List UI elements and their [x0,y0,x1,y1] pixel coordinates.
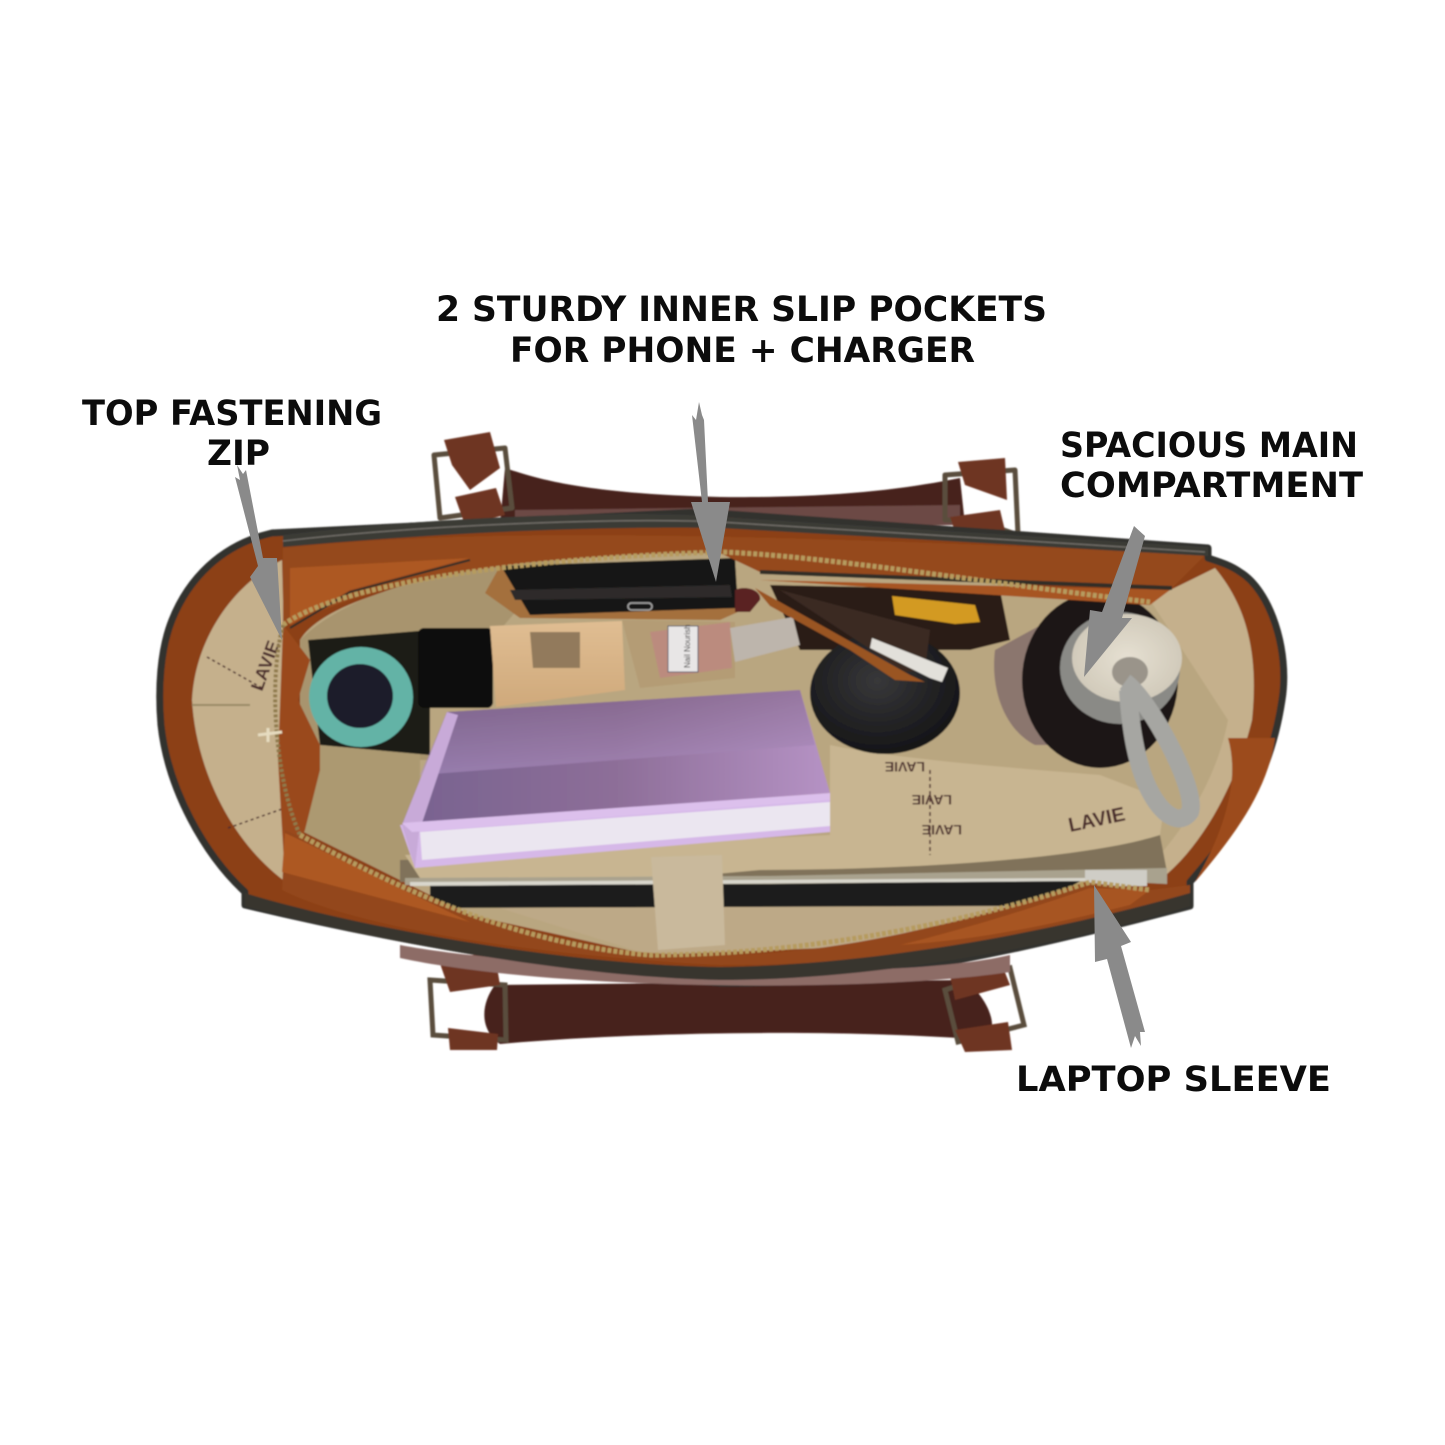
right lining [1100,568,1275,890]
band above laptop [400,835,1167,882]
wallet pocket with phone [485,558,760,620]
callout: inner slip pockets [436,290,1047,371]
callout: top fastening zip: TOP FASTENING [82,394,382,434]
dark top pocket shadow [770,585,1010,650]
black ball [810,632,960,754]
lower lining fold: LAVIE [885,759,925,775]
lower lining fold: LAVIE [1066,803,1127,837]
handbag photo [160,432,1284,1052]
left zipper [275,625,300,835]
top inner band [283,535,1205,625]
notebook [400,690,830,868]
laptop [405,868,1167,908]
white clip [870,638,948,682]
bottom rim [245,893,1190,980]
lower lining fold [405,745,1165,880]
grey strap loop [1125,682,1191,818]
lining below laptop [500,906,1030,955]
callout: spacious main compartment: SPACIOUS MAIN [1060,426,1358,466]
zip pull [258,728,282,742]
lining logo: LAVIE [247,638,283,693]
arrow: top fastening zip [235,465,282,640]
elastic strap [651,855,725,950]
lower lining fold: LAVIE [912,792,952,808]
main interior [300,552,1228,955]
left lining [192,560,290,885]
callout: spacious main compartment [1060,426,1363,506]
right bottom buckle [945,960,1024,1052]
callout: laptop sleeve: LAPTOP SLEEVE [1016,1060,1331,1100]
callout: inner slip pockets: FOR PHONE + CHARGER [510,331,975,371]
arrow: main compartment [1084,526,1145,677]
callout: inner slip pockets: 2 STURDY INNER SLIP POCKETS [436,290,1047,330]
left zip strip [278,625,320,880]
bottom inner band [282,830,1190,965]
right top buckle [945,458,1018,540]
pouch flap [755,588,925,682]
top zipper [283,552,1150,625]
callout: top fastening zip: ZIP [207,434,270,474]
foundation bottle [418,621,625,708]
top handle [434,432,1018,540]
left bottom buckle [430,955,506,1050]
thermos bottle [994,592,1191,818]
yellow tab [892,596,980,624]
arrow: laptop sleeve [1094,885,1145,1048]
bottom zipper [300,835,1150,955]
nail polish: Nail Nourish [683,624,692,668]
top rim [283,514,1208,556]
left top buckle [434,432,512,525]
arrow: inner slip pockets [691,402,730,582]
patterned tube [730,617,800,662]
bottom handle [430,955,1024,1052]
callout: top fastening zip [82,394,382,474]
callout: spacious main compartment: COMPARTMENT [1060,466,1363,506]
outer shell [160,512,1284,983]
lower lining fold: LAVIE [922,822,962,838]
nail polish [622,620,735,688]
lower mauve edge [400,945,1010,986]
round compact [308,630,430,755]
